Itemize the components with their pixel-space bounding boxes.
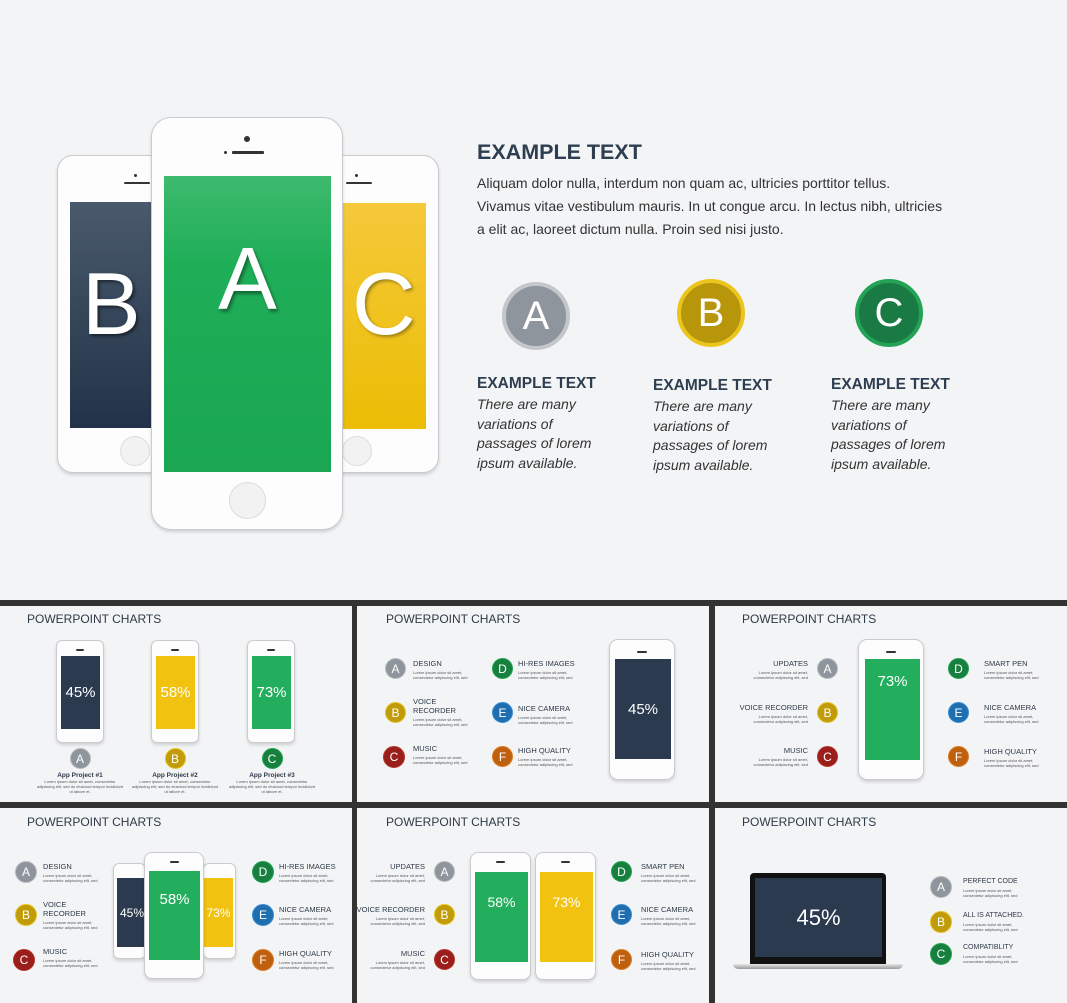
- item D: Lorem ipsum dolor sit amet,: [279, 873, 328, 878]
- phone 45%: [609, 639, 675, 780]
- item C: Lorem ipsum dolor sit amet, consectetur adipiscing elit, sed do eiusmod tempor incididunt ut labore et.: [229, 779, 315, 794]
- item C: [13, 947, 98, 971]
- phone 58%: 58%: [160, 684, 191, 701]
- heading: POWERPOINT CHARTS: [386, 815, 520, 829]
- item SMART PEN: D: [954, 662, 963, 676]
- item B: ALL IS ATTACHED.: [963, 912, 1024, 919]
- item E: consectetur adipiscing elit, sed: [279, 921, 333, 926]
- phone 58%: 58%: [487, 894, 516, 910]
- phone 73%: 73%: [877, 673, 908, 690]
- text block B: ipsum available.: [653, 456, 753, 472]
- phone 73%: [247, 640, 295, 743]
- panel: thumb 1: [0, 606, 352, 802]
- phone 73%: [535, 852, 596, 980]
- item NICE CAMERA: E: [954, 706, 962, 720]
- item E: NICE CAMERA: [279, 905, 331, 914]
- text block A: There are many: [477, 396, 576, 412]
- item VOICE RECORDER: [740, 702, 838, 724]
- item SMART PEN: [611, 861, 696, 883]
- item B: RECORDER: [413, 706, 456, 715]
- item VOICE RECORDER: consectetur adipiscing elit, sed: [371, 921, 425, 926]
- phone 73%: 73%: [552, 894, 581, 910]
- item A: App Project #1: [57, 772, 103, 779]
- panel: thumb 6: [715, 808, 1067, 1003]
- item MUSIC: Lorem ipsum dolor sit amet,: [376, 960, 425, 965]
- text block C: [830, 376, 950, 472]
- text block A: passages of lorem: [477, 435, 591, 451]
- icon: circle A: A: [523, 294, 549, 338]
- phone A: [151, 117, 343, 530]
- item D: [492, 658, 575, 680]
- item A: A: [391, 662, 400, 676]
- item MUSIC: [370, 949, 455, 970]
- item B: Lorem ipsum dolor sit amet,: [963, 922, 1012, 927]
- item SMART PEN: [948, 658, 1038, 680]
- item VOICE RECORDER: B: [823, 706, 832, 720]
- item C: App Project #3: [249, 772, 295, 779]
- item A: [930, 876, 1018, 898]
- item UPDATES: A: [823, 662, 832, 676]
- item F: Lorem ipsum dolor sit amet,: [279, 960, 328, 965]
- item UPDATES: Lorem ipsum dolor sit amet,: [376, 873, 425, 878]
- phone 58%: [470, 852, 531, 980]
- item NICE CAMERA: Lorem ipsum dolor sit amet,: [984, 714, 1033, 719]
- panel: thumb 4: [0, 808, 352, 1003]
- panel: thumb 2: VOICE: [413, 697, 436, 706]
- item A: A: [76, 752, 84, 766]
- item HIGH QUALITY: [948, 746, 1038, 768]
- icon: circle B: [677, 279, 745, 347]
- item C: consectetur adipiscing elit, sed: [963, 959, 1017, 964]
- text block C: EXAMPLE TEXT: [831, 376, 950, 393]
- item B: [930, 911, 1024, 933]
- text block C: ipsum available.: [831, 456, 931, 472]
- item A: A: [937, 880, 945, 894]
- item VOICE RECORDER: Lorem ipsum dolor sit amet,: [759, 714, 808, 719]
- item C: Lorem ipsum dolor sit amet,: [963, 954, 1012, 959]
- intro text: Vivamus vitae vestibulum mauris. In ut congue arcu. In lectus nibh, ultricies: [477, 198, 942, 214]
- item MUSIC: C: [440, 952, 449, 966]
- item C: C: [268, 752, 276, 766]
- phone C: C: [352, 254, 416, 353]
- item E: [252, 904, 334, 926]
- item A: A: [22, 865, 30, 879]
- item B: VOICE: [43, 900, 66, 909]
- panel: hero phones: [56, 117, 440, 533]
- item VOICE RECORDER: [357, 904, 455, 926]
- item F: consectetur adipiscing elit, sed: [279, 965, 333, 970]
- text block A: EXAMPLE TEXT: [477, 375, 596, 392]
- item B: consectetur adipiscing elit, sed: [963, 927, 1017, 932]
- heading: POWERPOINT CHARTS: [742, 612, 876, 626]
- laptop: [733, 873, 903, 969]
- item B: [15, 900, 98, 930]
- item B: [132, 748, 218, 794]
- item C: MUSIC: [413, 744, 437, 753]
- intro text: a elit ac, laoreet dictum nulla. Proin sed nisi justo.: [477, 221, 784, 237]
- icon: circle C: [855, 279, 923, 347]
- text block A: variations of: [477, 416, 552, 432]
- item MUSIC: C: [823, 750, 832, 764]
- item B: Lorem ipsum dolor sit amet, consectetur adipiscing elit, sed do eiusmod tempor incididunt ut labore et.: [132, 779, 218, 794]
- phone B: B: [82, 254, 141, 353]
- panel: thumb 5: [357, 808, 709, 1003]
- thumbnail grid background: [0, 600, 1067, 1003]
- text block A: [476, 375, 596, 471]
- item A: [15, 861, 98, 883]
- item HIGH QUALITY: F: [955, 750, 962, 764]
- heading: POWERPOINT CHARTS: [386, 612, 520, 626]
- item NICE CAMERA: [611, 904, 696, 926]
- item F: [492, 746, 572, 767]
- item HIGH QUALITY: consectetur adipiscing elit, sed: [641, 966, 695, 971]
- item VOICE RECORDER: B: [440, 908, 448, 922]
- item UPDATES: consectetur adipiscing elit, sed: [754, 675, 808, 680]
- phone 45%: [56, 640, 104, 743]
- panel: thumb 3: [715, 606, 1067, 802]
- text block B: variations of: [653, 418, 728, 434]
- item B: consectetur adipiscing elit, sed: [43, 925, 97, 930]
- item E: E: [259, 908, 267, 922]
- item B: B: [22, 908, 30, 922]
- item C: MUSIC: [43, 947, 67, 956]
- item NICE CAMERA: consectetur adipiscing elit, sed: [984, 719, 1038, 724]
- item F: HIGH QUALITY: [279, 949, 332, 958]
- item F: HIGH QUALITY: [518, 746, 571, 755]
- item MUSIC: MUSIC: [784, 746, 808, 755]
- item A: DESIGN: [43, 862, 72, 871]
- phone A: A: [218, 229, 277, 328]
- item NICE CAMERA: NICE CAMERA: [984, 703, 1036, 712]
- item SMART PEN: SMART PEN: [641, 862, 684, 871]
- text block B: There are many: [653, 398, 752, 414]
- item D: Lorem ipsum dolor sit amet,: [518, 670, 567, 675]
- item VOICE RECORDER: VOICE RECORDER: [740, 703, 808, 712]
- item MUSIC: MUSIC: [401, 949, 425, 958]
- item A: DESIGN: [413, 659, 442, 668]
- phones group: 58%: [159, 891, 190, 908]
- item UPDATES: consectetur adipiscing elit, sed: [371, 878, 425, 883]
- item A: [37, 748, 123, 794]
- intro text: Aliquam dolor nulla, interdum non quam ac, ultricies porttitor tellus.: [477, 175, 890, 191]
- item UPDATES: UPDATES: [390, 862, 425, 871]
- item A: consectetur adipiscing elit, sed: [43, 878, 97, 883]
- item C: C: [390, 750, 398, 764]
- text block C: There are many: [831, 397, 930, 413]
- item HIGH QUALITY: Lorem ipsum dolor sit amet,: [641, 961, 690, 966]
- phone C: [311, 155, 439, 473]
- item A: PERFECT CODE: [963, 878, 1018, 885]
- item B: App Project #2: [152, 772, 198, 779]
- item C: consectetur adipiscing elit, sed: [43, 963, 97, 968]
- phone 45%: 45%: [628, 700, 658, 718]
- item A: Lorem ipsum dolor sit amet,: [413, 670, 462, 675]
- phone 73%: 73%: [256, 684, 287, 701]
- item SMART PEN: D: [617, 864, 626, 878]
- item C: C: [20, 953, 28, 967]
- item NICE CAMERA: E: [617, 908, 626, 922]
- item B: RECORDER: [43, 909, 86, 918]
- item NICE CAMERA: Lorem ipsum dolor sit amet,: [641, 916, 690, 921]
- item VOICE RECORDER: consectetur adipiscing elit, sed: [754, 719, 808, 724]
- item NICE CAMERA: NICE CAMERA: [641, 905, 693, 914]
- item B: consectetur adipiscing elit, sed: [413, 722, 467, 727]
- heading: POWERPOINT CHARTS: [27, 815, 161, 829]
- item D: HI-RES IMAGES: [279, 862, 336, 871]
- item D: D: [498, 662, 507, 676]
- item HIGH QUALITY: consectetur adipiscing elit, sed: [984, 763, 1038, 768]
- item A: consectetur adipiscing elit, sed: [963, 893, 1017, 898]
- item HIGH QUALITY: HIGH QUALITY: [984, 747, 1037, 756]
- phone 45%: 45%: [65, 684, 96, 701]
- item A: [385, 658, 468, 680]
- item E: consectetur adipiscing elit, sed: [518, 720, 572, 725]
- title: EXAMPLE TEXT: [477, 140, 642, 164]
- item E: [492, 702, 572, 725]
- item MUSIC: consectetur adipiscing elit, sed: [371, 965, 425, 970]
- item F: F: [499, 750, 506, 764]
- item E: E: [498, 706, 506, 720]
- item NICE CAMERA: [948, 702, 1038, 724]
- item SMART PEN: SMART PEN: [984, 659, 1027, 668]
- item F: Lorem ipsum dolor sit amet,: [518, 757, 567, 762]
- icon: circle B: B: [698, 290, 724, 334]
- item C: Lorem ipsum dolor sit amet,: [413, 755, 462, 760]
- item UPDATES: UPDATES: [773, 659, 808, 668]
- phone 73%: [858, 639, 924, 780]
- item C: COMPATIBLITY: [963, 944, 1013, 951]
- item C: consectetur adipiscing elit, sed: [413, 760, 467, 765]
- item A: consectetur adipiscing elit, sed: [413, 675, 467, 680]
- item SMART PEN: Lorem ipsum dolor sit amet,: [641, 873, 690, 878]
- item A: Lorem ipsum dolor sit amet,: [43, 873, 92, 878]
- item C: [229, 748, 315, 794]
- text block C: passages of lorem: [831, 436, 945, 452]
- phone 58%: [151, 640, 199, 743]
- item D: consectetur adipiscing elit, sed: [518, 675, 572, 680]
- item UPDATES: Lorem ipsum dolor sit amet,: [759, 670, 808, 675]
- item E: Lorem ipsum dolor sit amet,: [518, 715, 567, 720]
- item MUSIC: [754, 746, 838, 767]
- item C: [930, 943, 1018, 965]
- item HIGH QUALITY: Lorem ipsum dolor sit amet,: [984, 758, 1033, 763]
- icon: circle C: C: [875, 290, 903, 334]
- item VOICE RECORDER: Lorem ipsum dolor sit amet,: [376, 916, 425, 921]
- heading: POWERPOINT CHARTS: [27, 612, 161, 626]
- item B: B: [391, 706, 400, 720]
- item SMART PEN: consectetur adipiscing elit, sed: [641, 878, 695, 883]
- item SMART PEN: Lorem ipsum dolor sit amet,: [984, 670, 1033, 675]
- item B: Lorem ipsum dolor sit amet,: [413, 717, 462, 722]
- icon: circle A: [502, 282, 570, 350]
- item F: consectetur adipiscing elit, sed: [518, 762, 572, 767]
- heading: POWERPOINT CHARTS: [742, 815, 876, 829]
- panel: thumb 2: [357, 606, 709, 802]
- text block B: EXAMPLE TEXT: [653, 377, 772, 394]
- phones group: 73%: [206, 906, 231, 920]
- item E: NICE CAMERA: [518, 704, 570, 713]
- item HIGH QUALITY: HIGH QUALITY: [641, 950, 694, 959]
- item C: [383, 744, 468, 768]
- item B: B: [171, 752, 179, 766]
- item D: [252, 861, 336, 883]
- phones group: [112, 852, 237, 982]
- item D: HI-RES IMAGES: [518, 659, 575, 668]
- item UPDATES: A: [440, 864, 448, 878]
- text block A: ipsum available.: [477, 454, 577, 470]
- text block B: [652, 377, 772, 473]
- phones group: 45%: [120, 906, 144, 920]
- item SMART PEN: consectetur adipiscing elit, sed: [984, 675, 1038, 680]
- item MUSIC: consectetur adipiscing elit, sed: [754, 762, 808, 767]
- item VOICE RECORDER: VOICE RECORDER: [357, 905, 425, 914]
- item B: [385, 697, 468, 727]
- item E: Lorem ipsum dolor sit amet,: [279, 916, 328, 921]
- item B: B: [937, 915, 945, 929]
- item NICE CAMERA: consectetur adipiscing elit, sed: [641, 921, 695, 926]
- item F: [252, 949, 334, 971]
- item MUSIC: Lorem ipsum dolor sit amet,: [759, 757, 808, 762]
- item B: Lorem ipsum dolor sit amet,: [43, 920, 92, 925]
- item C: C: [937, 947, 945, 961]
- item HIGH QUALITY: [611, 949, 696, 971]
- item HIGH QUALITY: F: [618, 952, 625, 966]
- item A: Lorem ipsum dolor sit amet, consectetur adipiscing elit, sed do eiusmod tempor incididunt ut labore et.: [37, 779, 123, 794]
- item C: Lorem ipsum dolor sit amet,: [43, 958, 92, 963]
- item UPDATES: [370, 861, 455, 883]
- text block C: variations of: [831, 416, 906, 432]
- phone B: [57, 155, 187, 473]
- laptop: 45%: [796, 904, 841, 930]
- intro text: [477, 175, 942, 237]
- item D: consectetur adipiscing elit, sed: [279, 878, 333, 883]
- text block B: passages of lorem: [653, 437, 767, 453]
- item UPDATES: [754, 658, 838, 680]
- item A: Lorem ipsum dolor sit amet,: [963, 888, 1012, 893]
- item D: D: [259, 865, 267, 879]
- item F: F: [259, 953, 267, 967]
